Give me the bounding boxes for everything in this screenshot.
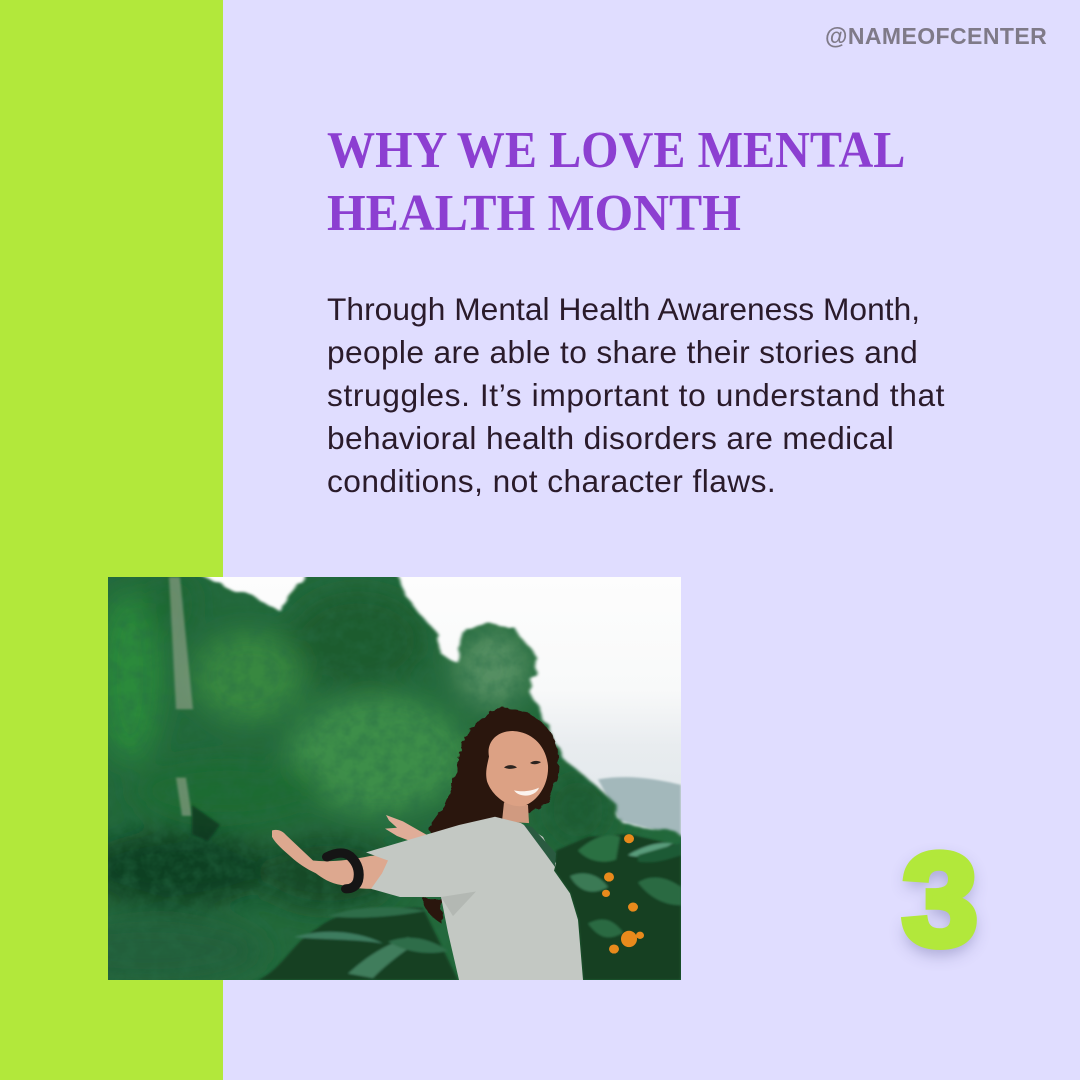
title: HEALTH MONTH bbox=[327, 185, 741, 242]
hair strand below arm bbox=[422, 898, 442, 923]
extended arm and hand bbox=[272, 830, 392, 889]
title: WHY WE LOVE MENTAL bbox=[327, 122, 905, 179]
distant mountain bbox=[598, 777, 681, 837]
photo: woman with arms outstretched in forest bbox=[108, 577, 681, 980]
sky bbox=[108, 577, 681, 980]
body text: struggles. It’s important to understand that bbox=[327, 377, 945, 413]
panel: green sidebar bbox=[0, 0, 223, 1080]
tree trunk bbox=[169, 577, 193, 816]
collar bbox=[524, 825, 556, 867]
handle: @NAMEOFCENTER bbox=[825, 23, 1047, 49]
body text: people are able to share their stories and bbox=[327, 334, 918, 370]
big number 3: 3 bbox=[902, 826, 978, 973]
leaves: lower centre bbox=[258, 907, 458, 980]
title bbox=[327, 122, 905, 242]
neck bbox=[502, 802, 529, 823]
scrunchie bbox=[327, 853, 359, 889]
sweater bbox=[366, 817, 583, 980]
body text: behavioral health disorders are medical bbox=[327, 420, 894, 456]
trunk shadow bbox=[192, 805, 220, 841]
back hand bbox=[385, 815, 427, 841]
smile bbox=[514, 788, 539, 796]
hair bbox=[430, 708, 559, 837]
body text: Through Mental Health Awareness Month, bbox=[327, 291, 920, 327]
eyes bbox=[504, 761, 541, 769]
sweater fold shadow bbox=[441, 892, 476, 916]
leaves: right plant with orange flowers bbox=[554, 834, 681, 980]
forest bbox=[108, 577, 681, 980]
body text: conditions, not character flaws. bbox=[327, 463, 776, 499]
flowers bbox=[602, 834, 644, 954]
body text bbox=[327, 291, 945, 499]
face bbox=[486, 731, 548, 806]
